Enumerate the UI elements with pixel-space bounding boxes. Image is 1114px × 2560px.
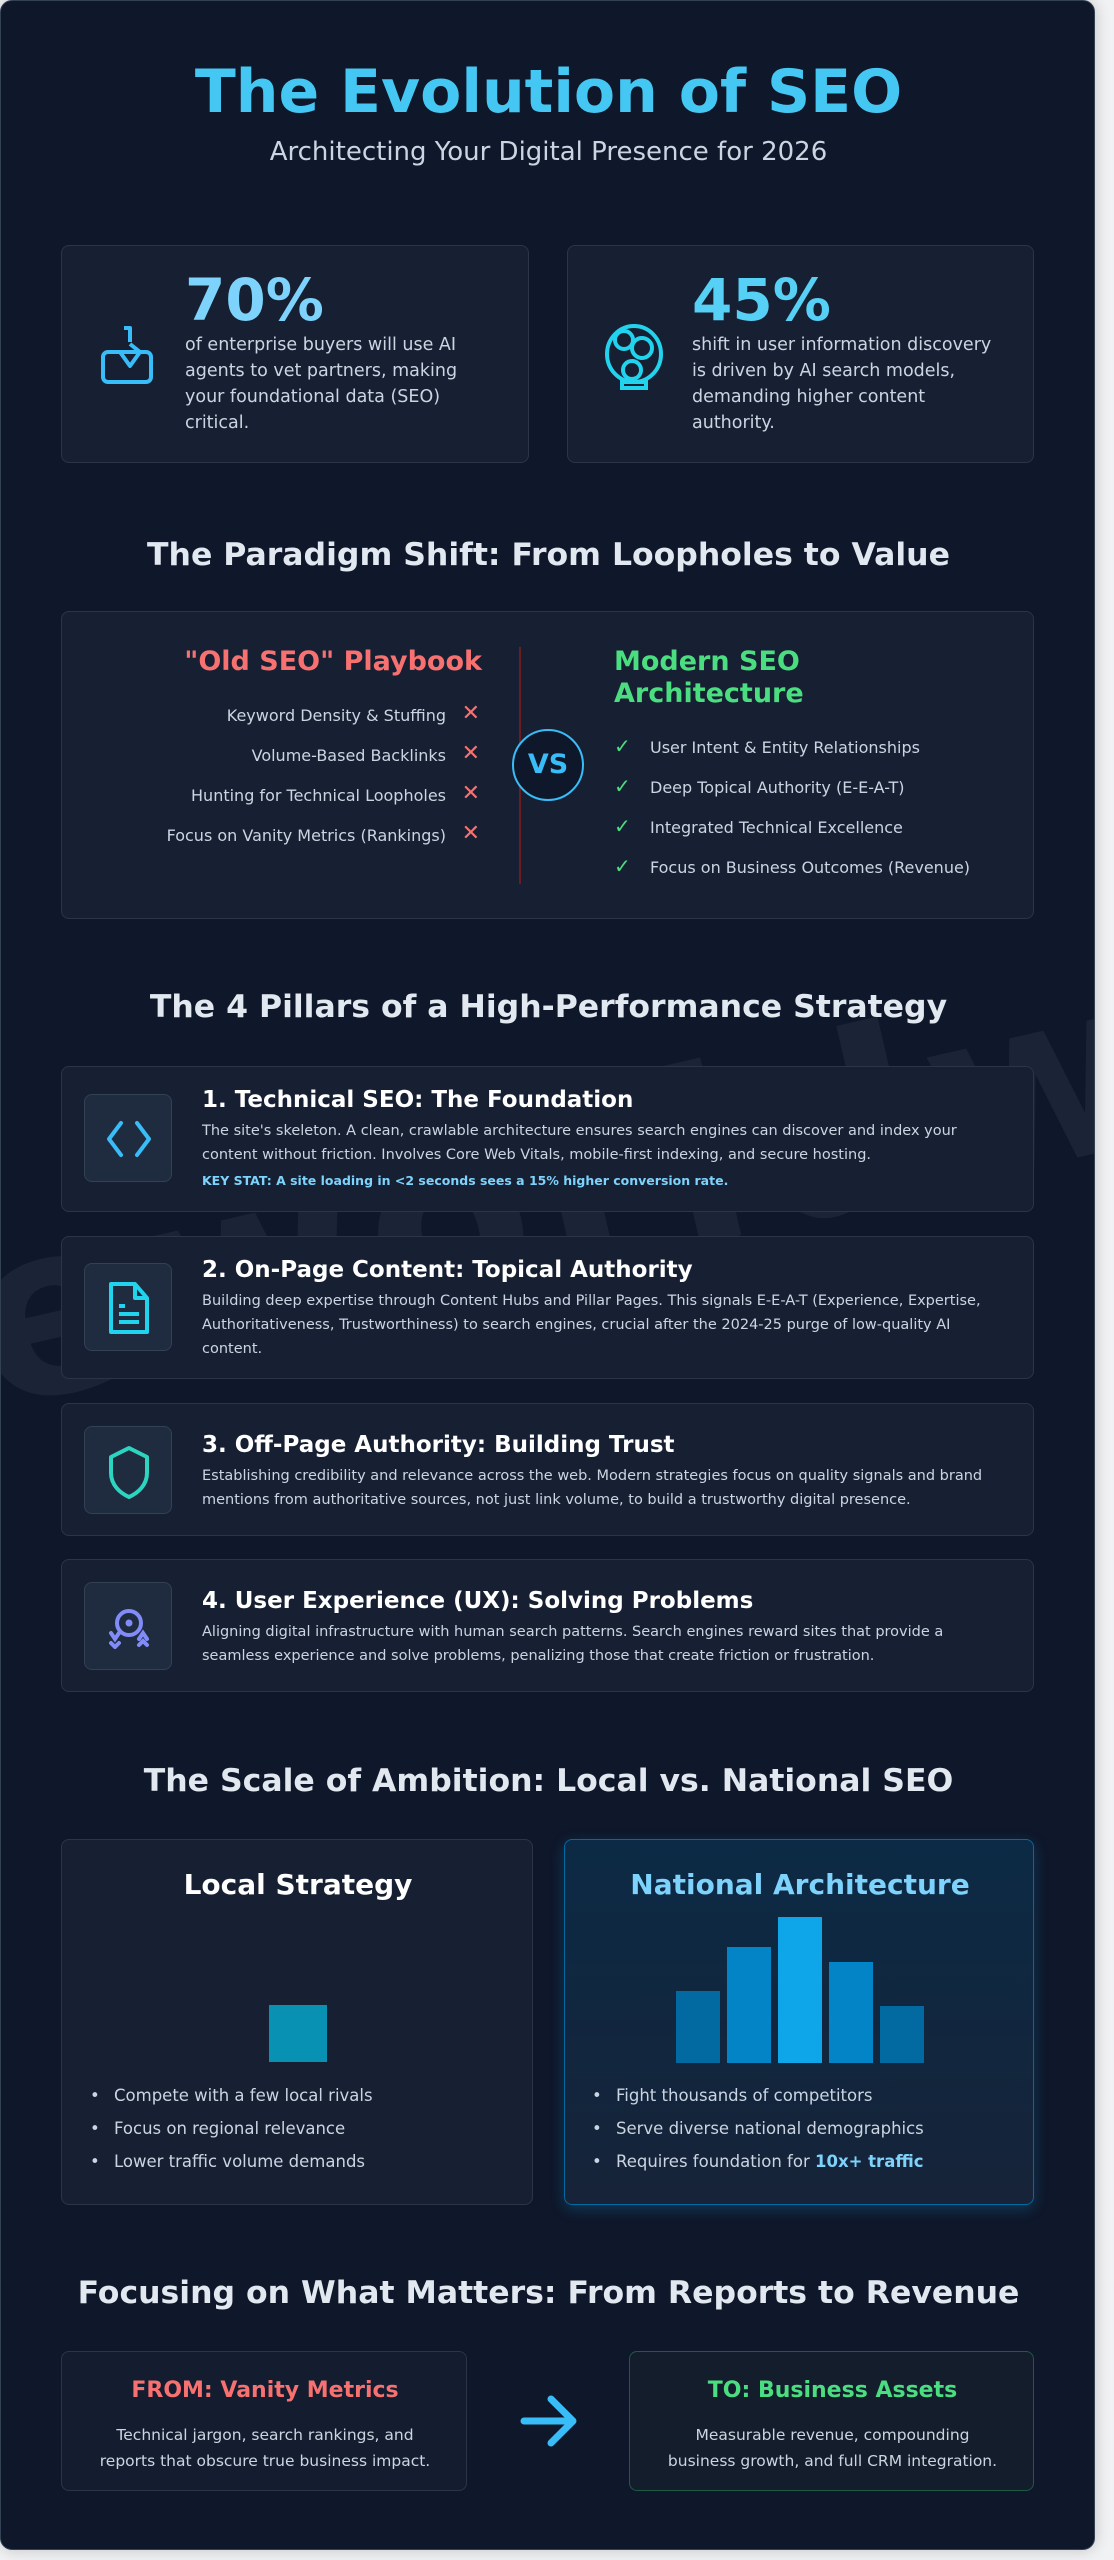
pillar 2 <box>61 1236 1034 1379</box>
stat text: shift in user information discovery is driven by AI search models, demanding higher content authority. <box>692 335 991 433</box>
old SEO column <box>167 646 482 846</box>
pillar 4: Aligning digital infrastructure with human search patterns. Search engines reward sites that provide a seamless experience and solve problems, penalizing those that create friction or frustration. <box>202 1624 943 1664</box>
panel: national architecture <box>564 1839 1034 2205</box>
stat number: 45% <box>692 266 831 334</box>
modern column: Integrated Technical Excellence <box>650 818 903 837</box>
VS badge: VS <box>528 749 568 780</box>
national title: National Architecture <box>630 1868 970 1901</box>
pillar 3: 3. Off-Page Authority: Building Trust <box>202 1432 674 1458</box>
pillar 4: 4. User Experience (UX): Solving Problems <box>202 1588 753 1614</box>
VS badge <box>512 729 584 801</box>
modern column <box>614 646 970 878</box>
local bullets: Focus on regional relevance <box>114 2119 345 2138</box>
local bullets <box>92 2086 373 2171</box>
icon: brain <box>605 324 663 390</box>
old SEO column: Volume-Based Backlinks <box>252 746 446 765</box>
modern column: ✓ <box>614 854 631 878</box>
pillar 1: The site's skeleton. A clean, crawlable architecture ensures search engines can discover and index your content without friction. Involves Core Web Vitals, mobile-first indexing, and secure hosting. <box>202 1123 957 1163</box>
local bullets: Lower traffic volume demands <box>114 2152 365 2171</box>
modern column: ✓ <box>614 814 631 838</box>
modern column: User Intent & Entity Relationships <box>650 738 920 757</box>
national bar chart <box>676 1917 924 2063</box>
panel: old vs modern <box>61 611 1034 919</box>
local title: Local Strategy <box>184 1868 412 1901</box>
box: to business assets: Measurable revenue, compounding <box>696 2426 969 2444</box>
pillar 4 <box>61 1559 1034 1692</box>
pillar 1: KEY STAT: A site loading in <2 seconds sees a 15% higher conversion rate. <box>202 1173 728 1188</box>
icon: shield <box>84 1426 172 1514</box>
box: from vanity metrics: Technical jargon, search rankings, and reports that obscure true business impact. <box>100 2426 430 2470</box>
local chart <box>269 2005 327 2062</box>
stat number: 70% <box>185 266 324 334</box>
title: The Evolution of SEO <box>195 57 902 127</box>
icon: document <box>84 1263 172 1351</box>
pillar 2: 2. On-Page Content: Topical Authority <box>202 1257 693 1283</box>
pillar 3 <box>61 1403 1034 1536</box>
icon: user experience <box>84 1582 172 1670</box>
icon: code <box>84 1094 172 1182</box>
box: to business assets <box>629 2351 1034 2491</box>
stat text: of enterprise buyers will use AI agents to vet partners, making your foundational data (SEO) critical. <box>185 335 457 433</box>
stat card 45% <box>567 245 1034 463</box>
box: from vanity metrics: FROM: Vanity Metrics <box>131 2378 399 2403</box>
old SEO column: Keyword Density & Stuffing <box>227 706 446 725</box>
old SEO column: ✕ <box>462 781 480 806</box>
pillar 1 <box>61 1066 1034 1212</box>
local bullets: Compete with a few local rivals <box>114 2086 373 2105</box>
box: to business assets: TO: Business Assets <box>708 2378 957 2403</box>
modern column: Deep Topical Authority (E-E-A-T) <box>650 778 905 797</box>
heading: scale of ambition: The Scale of Ambition: Local vs. National SEO <box>144 1763 953 1799</box>
national bullets: Requires foundation for 10x+ traffic <box>616 2152 924 2171</box>
pillar 3: Establishing credibility and relevance across the web. Modern strategies focus on quality signals and brand mentions from authoritative sources, not just link volume, to build a trustworthy digital presence. <box>202 1468 982 1508</box>
national bullets: Serve diverse national demographics <box>616 2119 924 2138</box>
arrow <box>520 2396 576 2446</box>
modern column: ✓ <box>614 734 631 758</box>
heading: 4 pillars: The 4 Pillars of a High-Performance Strategy <box>150 989 947 1025</box>
old SEO column: Hunting for Technical Loopholes <box>191 786 446 805</box>
modern column: ✓ <box>614 774 631 798</box>
old title: "Old SEO" Playbook <box>184 646 482 677</box>
national bullets <box>594 2086 924 2171</box>
box: to business assets: business growth, and full CRM integration. <box>668 2452 997 2470</box>
box: from vanity metrics <box>61 2351 467 2491</box>
national bullets: Fight thousands of competitors <box>616 2086 872 2105</box>
old SEO column: Focus on Vanity Metrics (Rankings) <box>167 826 446 845</box>
old SEO column: ✕ <box>462 741 480 766</box>
pillar 1: 1. Technical SEO: The Foundation <box>202 1087 633 1113</box>
pillar 2: Building deep expertise through Content Hubs and Pillar Pages. This signals E-E-A-T (Experience, Expertise, Authoritativeness, Trustworthiness) to search engines, crucial after the 2024-25 purge of low-quality AI content. <box>202 1293 981 1357</box>
heading: paradigm shift: The Paradigm Shift: From Loopholes to Value <box>147 537 950 573</box>
panel: local strategy <box>61 1839 533 2205</box>
modern column: Focus on Business Outcomes (Revenue) <box>650 858 970 877</box>
modern title: Architecture <box>614 678 804 709</box>
old SEO column: ✕ <box>462 821 480 846</box>
stat card 70% <box>61 245 529 463</box>
modern title <box>614 646 804 709</box>
modern title: Modern SEO <box>614 646 800 677</box>
icon: inbox <box>101 326 153 384</box>
heading: focusing: Focusing on What Matters: From Reports to Revenue <box>78 2275 1019 2311</box>
old SEO column: ✕ <box>462 701 480 726</box>
subtitle: Architecting Your Digital Presence for 2026 <box>270 137 827 167</box>
